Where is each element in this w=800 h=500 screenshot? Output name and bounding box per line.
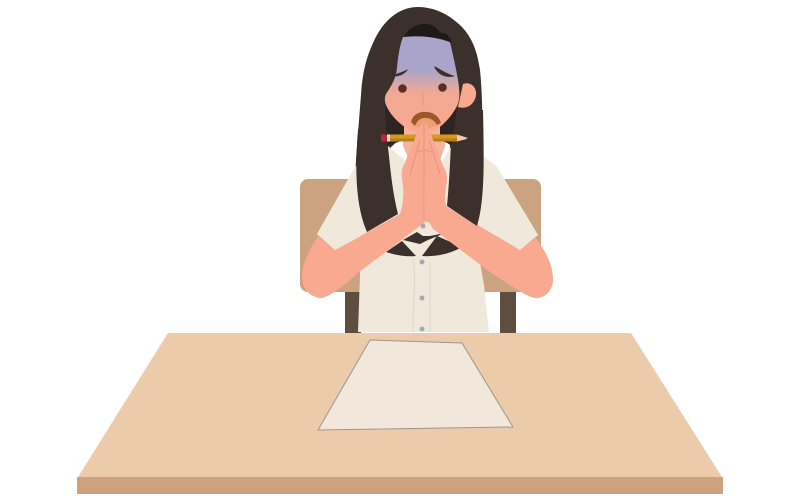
hair under arms <box>386 232 462 256</box>
hair top tuft <box>404 24 452 43</box>
mouth <box>411 112 441 128</box>
face <box>385 36 459 133</box>
nose line <box>422 90 424 107</box>
hair back <box>355 7 483 232</box>
hair beside chin <box>385 100 458 146</box>
left sleeve <box>317 167 361 250</box>
desk <box>77 333 723 494</box>
eyebrows <box>389 66 455 77</box>
right sleeve <box>476 157 538 250</box>
hair left lock front <box>356 90 398 232</box>
ear <box>458 83 476 108</box>
right arm <box>425 207 553 298</box>
left arm <box>302 205 425 298</box>
praying hands <box>400 122 447 222</box>
shirt <box>317 145 538 332</box>
chair <box>300 179 541 333</box>
hair right lock front <box>447 110 484 226</box>
shirt buttons <box>420 224 426 332</box>
eyes <box>398 83 447 93</box>
neck <box>403 120 445 166</box>
pencil <box>381 134 468 142</box>
paper <box>318 340 513 430</box>
